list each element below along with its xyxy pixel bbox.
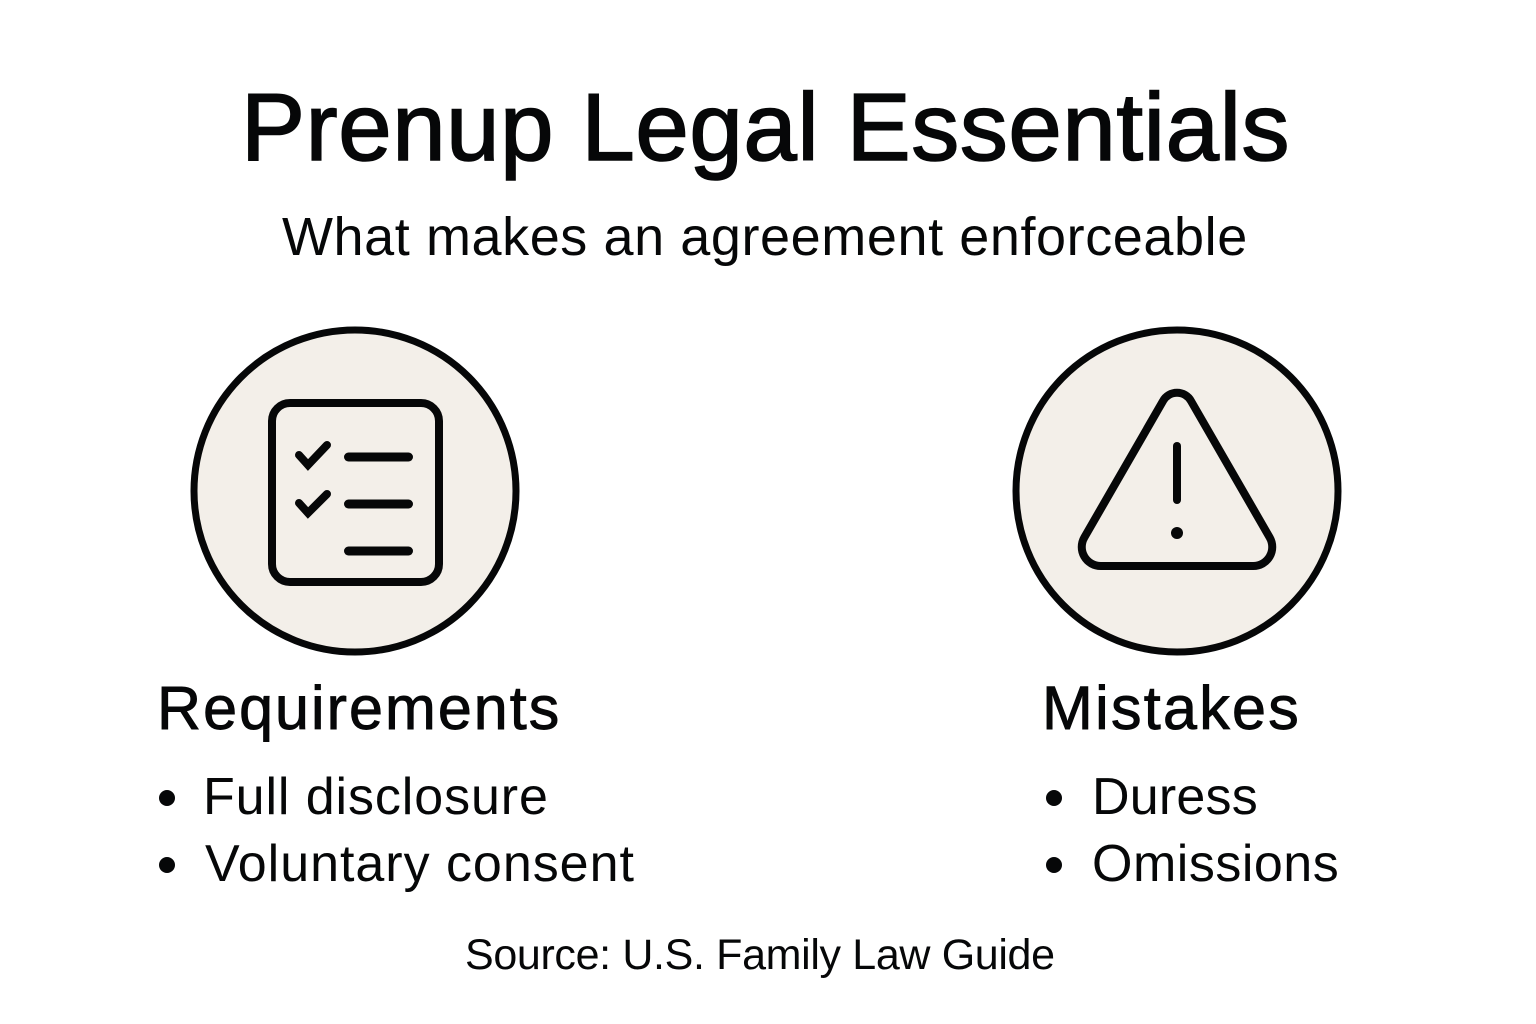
bullet item: voluntary consent: Voluntary consent [205, 835, 635, 893]
bullet dot [1046, 857, 1062, 873]
subtitle: What makes an agreement enforceable [282, 207, 1248, 267]
icon: checklist in circle [190, 326, 520, 656]
bullet dot [159, 790, 175, 806]
requirements list [159, 768, 635, 893]
heading: mistakes: Mistakes [1042, 674, 1301, 742]
bullet dot [159, 857, 175, 873]
mistakes list [1046, 768, 1339, 893]
title: Prenup Legal Essentials [241, 74, 1290, 181]
source note: Source: U.S. Family Law Guide [465, 931, 1055, 979]
bullet item: full disclosure: Full disclosure [203, 768, 549, 826]
heading: requirements: Requirements [157, 674, 561, 742]
bullet item: duress: Duress [1092, 768, 1258, 826]
icon: warning triangle in circle [1012, 326, 1342, 656]
bullet dot [1046, 790, 1062, 806]
bullet item: omissions: Omissions [1092, 835, 1339, 893]
